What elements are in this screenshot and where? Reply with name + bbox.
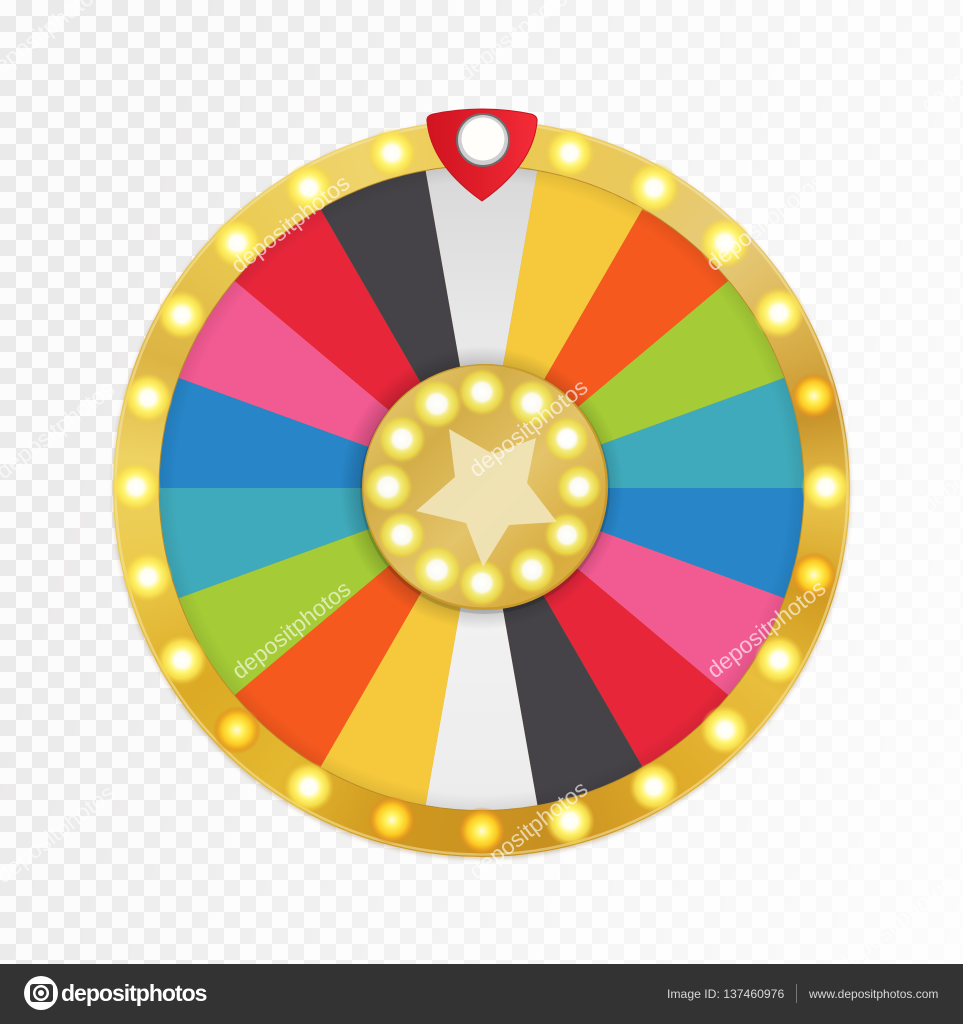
- website url: www.depositphotos.com: [809, 987, 938, 1001]
- pointer gem: [456, 113, 510, 167]
- hub star: [416, 429, 557, 567]
- prize wheel wedges: [158, 165, 804, 811]
- watermarks: depositphotos: [464, 775, 593, 884]
- watermarks: depositphotos: [227, 575, 356, 684]
- outer ring light bulbs: [111, 128, 851, 855]
- centre hub: [360, 364, 610, 614]
- logo camera icon: [24, 976, 58, 1010]
- footer bar: [0, 964, 963, 1024]
- watermarks: depositphotos: [831, 869, 960, 978]
- hub sparkle: [555, 426, 579, 450]
- gold wheel ring: [113, 120, 850, 857]
- red pointer: [427, 109, 537, 201]
- watermarks: depositphotos: [226, 169, 355, 278]
- logo wordmark: depositphotos: [61, 980, 206, 1006]
- watermarks: depositphotos: [701, 167, 830, 276]
- footer logo: [24, 976, 206, 1010]
- watermarks: depositphotos: [464, 373, 593, 482]
- hub light bulbs: [363, 368, 602, 607]
- image id text: Image ID: 137460976: [667, 987, 784, 1001]
- watermarks: depositphotos: [702, 574, 831, 683]
- ring rim highlight: [116, 122, 848, 854]
